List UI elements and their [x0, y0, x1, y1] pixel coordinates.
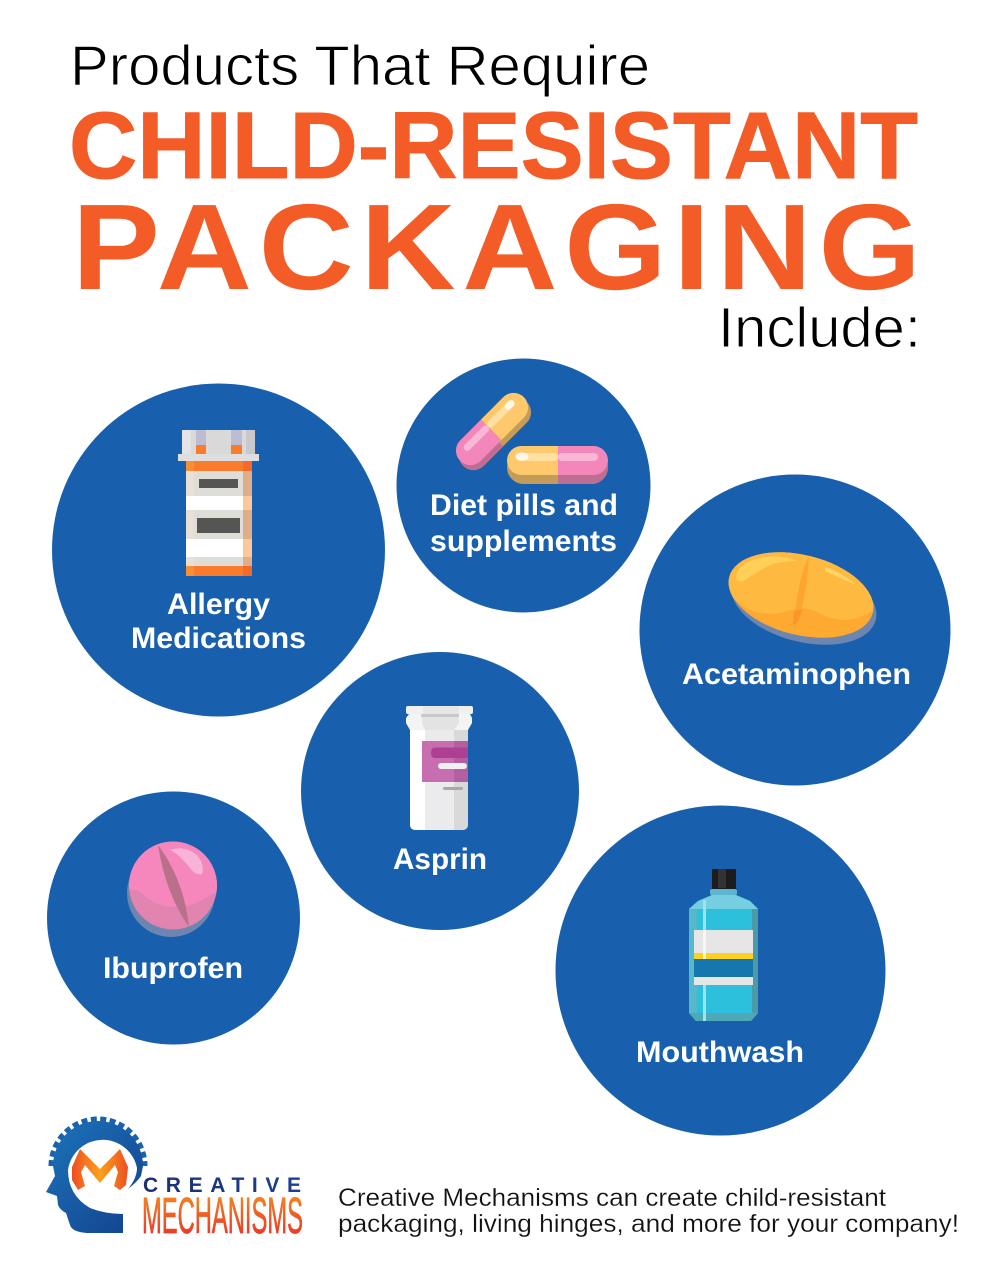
panel: diet pills and supplements	[396, 358, 650, 612]
icon: gear head	[46, 1119, 145, 1233]
panel: ibuprofen	[47, 792, 300, 1044]
panel: mouthwash	[556, 806, 886, 1136]
icon: prescription bottle	[178, 430, 259, 576]
label: allergy: Allergy	[167, 588, 270, 621]
icon: capsules	[450, 387, 608, 484]
label: acetaminophen: Acetaminophen	[682, 658, 911, 691]
title: products that require: Products That Require	[70, 34, 650, 98]
panel: acetaminophen	[640, 474, 950, 786]
icon: oval tablet	[728, 552, 876, 645]
label: medications: Medications	[131, 622, 306, 655]
label: diet pills and: Diet pills and	[430, 489, 618, 522]
wordmark: creative: CREATIVE	[143, 1174, 301, 1197]
text: MECHANISMS	[142, 1187, 303, 1244]
footer text line 1: Creative Mechanisms can create child-resistant	[338, 1184, 886, 1212]
logo: creative mechanisms	[46, 1119, 303, 1244]
footer text line 2: packaging, living hinges, and more for your company!	[338, 1210, 959, 1238]
panel: aspirin	[301, 652, 579, 930]
label: asprin: Asprin	[393, 843, 487, 876]
label: mouthwash: Mouthwash	[636, 1036, 804, 1069]
panel: allergy medications	[52, 384, 385, 716]
label: ibuprofen: Ibuprofen	[103, 952, 243, 985]
label: supplements: supplements	[430, 525, 617, 558]
title: packaging: PACKAGING	[72, 179, 928, 315]
icon: round tablet	[127, 842, 217, 937]
title: include: Include:	[718, 296, 921, 360]
title: child-resistant: CHILD-RESISTANT	[69, 93, 918, 199]
icon: mouthwash bottle	[689, 869, 758, 1021]
icon: aspirin bottle	[406, 706, 473, 830]
